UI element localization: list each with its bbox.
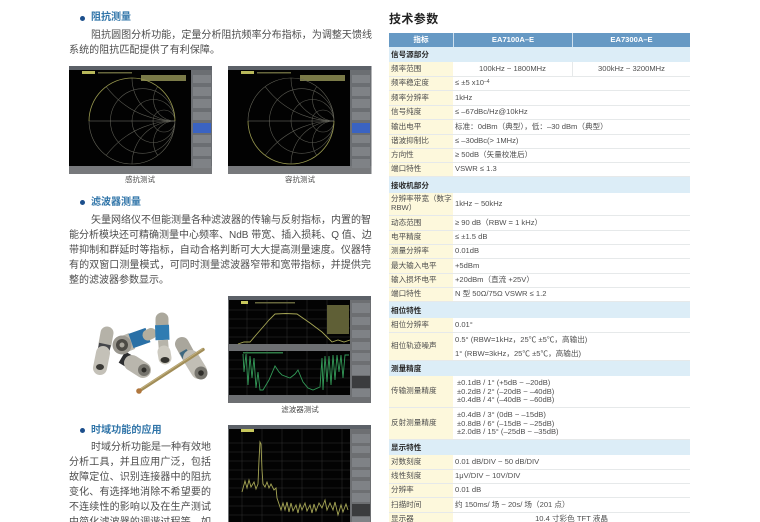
table: technical specifications: 1μV/DIV ~ 10V/DIV — [455, 471, 520, 480]
table: technical specifications: 相位轨迹噪声 — [391, 341, 437, 350]
table: technical specifications: 扫描时间 — [391, 500, 421, 509]
table: technical specifications: 0.01° — [455, 320, 473, 329]
table: technical specifications: 传输测量精度 — [391, 386, 437, 395]
text: time domain description: 不连续性的影响以及在生产测试 — [69, 502, 211, 513]
table: technical specifications: 输出电平 — [391, 122, 421, 131]
text: time domain description: 分析工具，并且应用广泛，包括 — [69, 457, 211, 468]
photo: filter connectors — [96, 319, 208, 394]
text: impedance description — [69, 29, 372, 56]
table: technical specifications: 频率稳定度 — [391, 78, 429, 87]
table: technical specifications: VSWR ≤ 1.3 — [455, 164, 497, 173]
table: technical specifications: 1° (RBW=3kHz，25℃ ±5℃，高输出) — [455, 349, 581, 358]
text: filter description: 整的滤波器参数显示。 — [69, 275, 169, 286]
table: technical specifications: ±0.4dB / 4° (–40dB ~ –60dB) — [457, 395, 554, 404]
table: technical specifications: ≤ ±5 x10 — [455, 78, 484, 87]
table: technical specifications: 约 150ms/ 场 ~ 20s/ 场（201 点） — [455, 500, 570, 509]
caption: filter test: 滤波器测试 — [281, 405, 319, 414]
bullet: filter — [80, 200, 85, 205]
text: impedance description: 阻抗圆图分析功能，定量分析阻抗频率分布指标，为调整天馈线 — [91, 30, 372, 41]
table: technical specifications: 0.01dB — [455, 246, 479, 255]
table: technical specifications: ≤ –30dBc(> 1MHz) — [455, 136, 518, 145]
table: technical specifications: 100kHz ~ 1800MHz — [479, 64, 546, 73]
section: signal source — [389, 47, 690, 62]
table: technical specifications: 信号纯度 — [391, 107, 421, 116]
table: technical specifications: ≥ 90 dB（RBW = 1 kHz） — [455, 218, 542, 227]
table: technical specifications: ±0.1dB / 1° (+5dB ~ –20dB) — [457, 378, 550, 387]
table: technical specifications: 反射测量精度 — [391, 418, 437, 427]
table: technical specifications: 0.01 dB/DIV ~ 50 dB/DIV — [455, 457, 539, 466]
text: filter description: 有的双窗口测量模式，可同时测量滤波器窄带和宽带指标，并提供完 — [69, 260, 371, 271]
table: technical specifications: 方向性 — [391, 150, 414, 159]
bullet: impedance — [80, 16, 85, 21]
table: technical specifications: ≥ 50dB（矢量校准后） — [455, 150, 532, 159]
table: technical specifications: 电平精度 — [391, 232, 421, 241]
table: technical specifications: +20dBm（直流 +25V） — [455, 275, 534, 284]
section: display: 显示特性 — [391, 443, 421, 452]
table: technical specifications: 0.5° (RBW=1kHz，25℃ ±5℃，高输出) — [455, 335, 587, 344]
table header: 指标 — [413, 35, 429, 44]
section: measurement accuracy — [389, 361, 690, 376]
connector: blue diagonal — [112, 334, 151, 354]
table: technical specifications: 对数刻度 — [391, 457, 421, 466]
table: technical specifications: N 型 50Ω/75Ω VSWR ≤ 1.2 — [455, 289, 546, 298]
table: technical specifications: ≤ ±1.5 dB — [455, 232, 487, 241]
table: technical specifications: 分辨率 — [391, 485, 414, 494]
connector: left vertical — [96, 333, 107, 370]
connector: right diagonal — [182, 344, 208, 380]
section: signal source: 信号源部分 — [391, 50, 429, 59]
table: technical specifications: +5dBm — [455, 261, 479, 270]
text: time domain description: 变化、有选择地消除不希望要的 — [69, 486, 211, 498]
text: filter description: 矢量网络仪不但能测量各种滤波器的传输与反射指标，内置的智 — [91, 215, 371, 226]
table: technical specifications: 1kHz — [455, 93, 472, 102]
table: technical specifications: 1kHz ~ 50kHz — [455, 199, 502, 208]
table: technical specifications: 最大输入电平 — [391, 261, 437, 270]
table: technical specifications: 测量分辨率 — [391, 246, 429, 255]
table: technical specifications: ≤ –67dBc/Hz@10kHz — [455, 107, 528, 116]
text: filter description — [69, 214, 372, 286]
table header: EA7100A–E — [492, 35, 534, 44]
table: technical specifications: 谐波抑制比 — [391, 136, 429, 145]
table: technical specifications: 动态范围 — [391, 218, 421, 227]
table: technical specifications: 端口特性 — [391, 164, 421, 173]
connector: lower diagonal — [122, 357, 150, 376]
text: impedance description: 系统的阻抗匹配提供了有利保障。 — [69, 45, 220, 56]
table: technical specifications: ±0.4dB / 3° (0dB ~ –15dB) — [457, 410, 546, 419]
bullet: time domain — [80, 428, 85, 433]
table: technical specifications: 标准：0dBm（典型），低：–30 dBm（典型） — [455, 122, 608, 131]
screenshot: filter dual-window measurement — [228, 296, 371, 403]
section: phase: 相位特性 — [391, 306, 421, 314]
table: technical specifications: 300kHz ~ 3200MHz — [598, 64, 665, 73]
heading: time domain application: 时域功能的应用 — [91, 425, 162, 436]
table: technical specifications: 频率分辨率 — [391, 93, 429, 102]
caption: capacitive test: 容抗测试 — [285, 175, 315, 184]
table: technical specifications: ±0.2dB / 2° (–20dB ~ –40dB) — [457, 387, 554, 396]
section: measurement accuracy: 测量精度 — [391, 364, 421, 373]
heading: filter measurement: 滤波器测量 — [91, 197, 141, 208]
connector: gold rod — [136, 348, 203, 394]
table: technical specifications: 输入损坏电平 — [391, 275, 437, 284]
table: technical specifications: ±2.0dB / 15° (–25dB ~ –35dB) — [457, 427, 559, 436]
table: technical specifications: 端口特性 — [391, 289, 421, 298]
section: receiver: 接收机部分 — [391, 180, 429, 190]
table: technical specifications: 线性刻度 — [391, 471, 421, 480]
table: technical specifications — [389, 33, 690, 522]
heading: impedance measurement: 阻抗测量 — [91, 12, 131, 23]
table: technical specifications: –4 — [484, 78, 490, 84]
table: technical specifications: ±0.8dB / 6° (–15dB ~ –25dB) — [457, 419, 554, 428]
table: technical specifications: 分辨率带宽（数字RBW） — [391, 194, 452, 212]
section: display — [389, 440, 690, 455]
connector: vertical blue — [160, 319, 170, 363]
screenshot: capacitive Smith chart — [228, 66, 372, 174]
screenshot: inductive Smith chart — [69, 66, 212, 174]
text: time domain description: 时域分析功能是一种有效地 — [91, 442, 211, 453]
heading: technical parameters: 技术参数 — [389, 12, 439, 26]
section: phase — [389, 302, 690, 318]
text: filter description: 带抑制和群延时等指标，自动合格判断可大大提高测量速度。仪器特 — [69, 245, 371, 256]
table header: EA7300A–E — [610, 35, 653, 44]
text: time domain description — [69, 441, 211, 522]
screenshot: time domain analysis — [228, 425, 371, 522]
table: technical specifications: 0.01 dB — [455, 485, 481, 494]
caption: inductive test: 感抗测试 — [125, 175, 155, 184]
table: technical specifications: 频率范围 — [391, 64, 421, 73]
section: receiver — [389, 177, 690, 193]
text: time domain description: 故障定位、识别连接器中的阻抗 — [69, 472, 211, 483]
table header — [389, 33, 690, 47]
table: technical specifications: 相位分辨率 — [391, 320, 429, 329]
text: filter description: 能分析模块还可精确测量中心频率、NdB 带宽、插入损耗、Q 值、边 — [69, 230, 372, 241]
